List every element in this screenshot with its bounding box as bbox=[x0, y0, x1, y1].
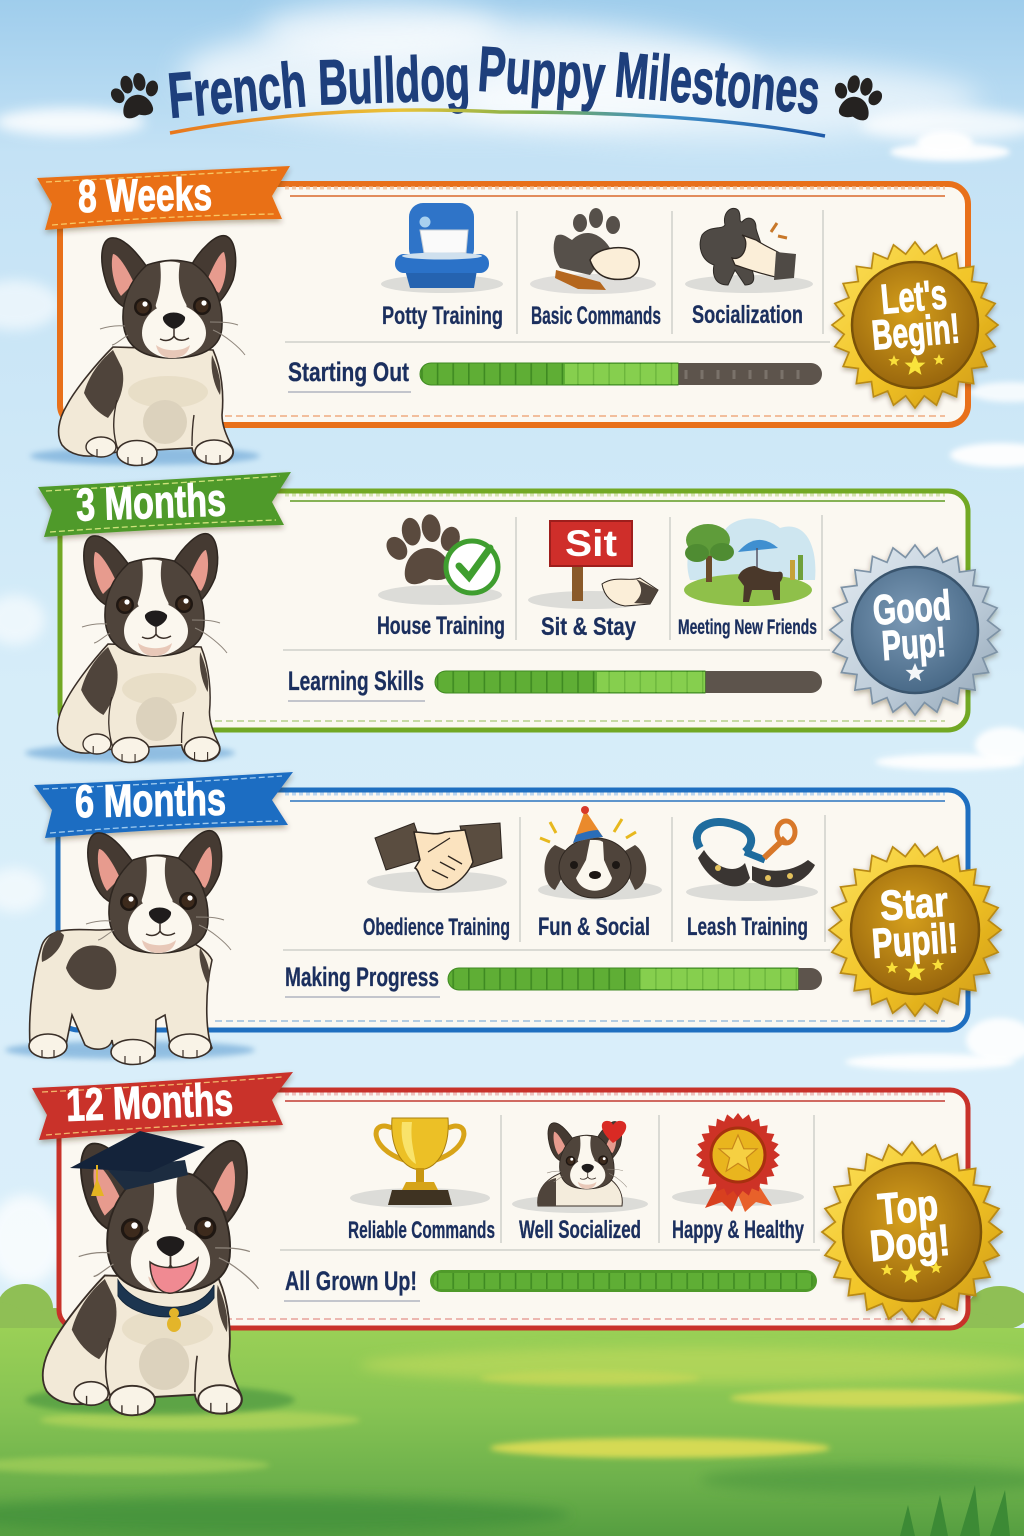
icon: park scene bbox=[684, 518, 815, 606]
icon: paw and check bbox=[378, 509, 502, 605]
illustration: 6 month puppy bbox=[5, 831, 255, 1064]
dividers bbox=[283, 815, 830, 950]
progress label: Starting Out: Starting Out bbox=[288, 357, 409, 387]
badge: Star Pupil bbox=[829, 844, 1001, 1016]
badge: Let's Begin: Let's bbox=[879, 270, 949, 323]
ribbon: 3 Months: 3 Months bbox=[75, 473, 227, 531]
background: meadow bbox=[0, 1328, 1024, 1536]
icon: leash and collar bbox=[686, 821, 818, 901]
progress bar bbox=[420, 363, 822, 385]
icon: paw and hand bbox=[530, 208, 656, 294]
icon: puppy with heart bbox=[512, 1121, 648, 1213]
progress label: Learning Skills bbox=[288, 666, 425, 702]
open mouth bbox=[150, 1258, 198, 1293]
icon: Sit sign bbox=[528, 521, 658, 609]
badge: Star Pupil: Star bbox=[878, 878, 949, 929]
ribbon: 12 Months: 12 Months bbox=[65, 1073, 234, 1131]
icon: hand petting dog bbox=[685, 208, 813, 293]
icon: handshake bbox=[367, 823, 507, 893]
label: Happy & Healthy: Happy & Healthy bbox=[672, 1216, 804, 1244]
dividers bbox=[285, 210, 830, 342]
progress bar bbox=[435, 671, 822, 693]
icon: Sit sign: Sit bbox=[565, 523, 617, 564]
title text: Milestones bbox=[612, 38, 823, 128]
illustration: 12 month graduate puppy bbox=[25, 1131, 295, 1415]
title text: French bbox=[165, 48, 309, 132]
label: Obedience Training: Obedience Training bbox=[363, 914, 510, 941]
progress bar bbox=[430, 1270, 817, 1292]
ribbon: 6 Months bbox=[34, 772, 293, 838]
icon: party puppy bbox=[538, 806, 662, 900]
title text: Puppy bbox=[476, 33, 608, 113]
ribbon: 8 Weeks bbox=[37, 166, 290, 230]
icon: trophy bbox=[350, 1118, 490, 1208]
dividers bbox=[280, 1115, 820, 1250]
title underline bbox=[170, 110, 825, 136]
badge: Good Pup bbox=[830, 545, 1000, 715]
badge: Good Pup: Good bbox=[871, 581, 952, 634]
icon: right paw bbox=[827, 71, 888, 124]
title text bbox=[165, 33, 823, 132]
panel frame bbox=[60, 491, 968, 730]
label: House Training: House Training bbox=[377, 612, 505, 640]
icon: rosette bbox=[672, 1113, 804, 1212]
panel frame bbox=[59, 1090, 968, 1328]
label: Potty Training: Potty Training bbox=[382, 302, 503, 330]
label: Sit & Stay: Sit & Stay bbox=[541, 613, 636, 641]
badge: Let's Begin bbox=[832, 242, 998, 408]
title text: Bulldog bbox=[317, 41, 471, 119]
progress label: Starting Out bbox=[288, 357, 411, 393]
label: Reliable Commands: Reliable Commands bbox=[348, 1217, 495, 1244]
badge: Top Dog bbox=[822, 1142, 1002, 1322]
label: Fun & Social: Fun & Social bbox=[538, 913, 650, 941]
panel: 3 Months bbox=[25, 472, 1000, 762]
label: Meeting New Friends: Meeting New Friends bbox=[678, 616, 817, 639]
panel: 6 Months bbox=[5, 772, 1001, 1064]
progress label: Learning Skills: Learning Skills bbox=[288, 666, 424, 696]
badge: Top Dog: Top bbox=[876, 1180, 940, 1235]
collar and tag bbox=[118, 1280, 214, 1332]
panel: 8 Weeks bbox=[30, 166, 998, 466]
panel frame bbox=[58, 790, 968, 1030]
title bbox=[105, 33, 888, 136]
badge: Good Pup: Pup! bbox=[880, 618, 947, 669]
label: Well Socialized: Well Socialized bbox=[519, 1216, 641, 1244]
background: trees on horizon bbox=[0, 1284, 1024, 1339]
label: Socialization: Socialization bbox=[692, 301, 803, 329]
progress label: All Grown Up bbox=[284, 1266, 420, 1302]
progress label: All Grown Up: All Grown Up! bbox=[285, 1266, 417, 1296]
badge: Top Dog: Dog! bbox=[868, 1216, 952, 1271]
progress bar bbox=[448, 968, 822, 990]
icon: left paw bbox=[105, 69, 166, 122]
label: Basic Commands: Basic Commands bbox=[531, 302, 661, 330]
illustration: 3 month puppy bbox=[25, 534, 235, 762]
ribbon: 8 Weeks: 8 Weeks bbox=[78, 168, 212, 222]
icon: potty bbox=[381, 203, 503, 293]
illustration: 8 week puppy bbox=[30, 236, 260, 466]
panel frame bbox=[60, 184, 968, 425]
ribbon: 6 Months: 6 Months bbox=[75, 773, 226, 827]
badge: Let's Begin: Begin! bbox=[870, 304, 962, 359]
progress label: Making Progress: Making Progress bbox=[285, 962, 439, 992]
label: Leash Training: Leash Training bbox=[687, 913, 808, 941]
badge: Star Pupil: Pupil! bbox=[870, 914, 959, 967]
panel: 12 Months bbox=[25, 1072, 1002, 1415]
dividers bbox=[283, 515, 830, 650]
graduation cap bbox=[70, 1131, 205, 1196]
